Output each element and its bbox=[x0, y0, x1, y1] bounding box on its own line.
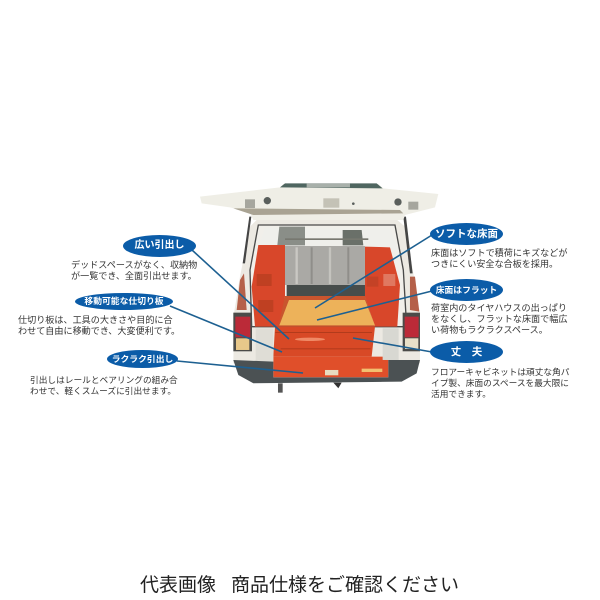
text: wide drawer: デッドスペースがなく、収納物 bbox=[71, 260, 197, 270]
text: flat floor: い荷物もラクラクスペース。 bbox=[431, 325, 548, 335]
label: wide drawer bbox=[123, 235, 196, 257]
text: soft floor: つきにくい安全な合板を採用。 bbox=[431, 259, 558, 269]
label: flat floor: 床面はフラット bbox=[436, 285, 497, 295]
label: sturdy: 丈 夫 bbox=[451, 346, 482, 358]
label: flat floor bbox=[430, 279, 503, 301]
label: soft floor bbox=[430, 223, 503, 245]
label: sturdy bbox=[430, 341, 503, 363]
label: easy drawer: ラクラク引出し bbox=[112, 354, 173, 364]
text: soft floor: 床面はソフトで積荷にキズなどが bbox=[431, 248, 567, 258]
text: wide drawer bbox=[71, 260, 197, 281]
text: movable partition: 仕切り板は、工具の大きさや目的に合 bbox=[18, 315, 173, 325]
label: easy drawer bbox=[107, 350, 178, 368]
text: easy drawer: わせで、軽くスムーズに引出せます。 bbox=[30, 386, 176, 396]
caption: 代表画像 商品仕様をご確認ください bbox=[140, 575, 459, 596]
text: sturdy bbox=[431, 367, 570, 399]
text: sturdy: フロアーキャビネットは頑丈な角パ bbox=[431, 367, 569, 377]
text: flat floor: 荷室内のタイヤハウスの出っぱり bbox=[431, 303, 567, 313]
leader line: soft floor bbox=[315, 235, 432, 308]
leader line: wide drawer bbox=[192, 250, 289, 339]
text: sturdy: イプ製、床面のスペースを最大限に bbox=[431, 378, 569, 388]
label: soft floor: ソフトな床面 bbox=[435, 228, 498, 240]
leader line: flat floor bbox=[317, 291, 432, 320]
leader line: easy drawer bbox=[177, 361, 303, 373]
text: movable partition bbox=[18, 315, 180, 336]
label: wide drawer: 広い引出し bbox=[134, 240, 184, 251]
text: flat floor: をなくし、フラットな床面で幅広 bbox=[431, 314, 567, 324]
label: movable partition bbox=[75, 293, 173, 310]
text: sturdy: 活用できます。 bbox=[431, 389, 491, 399]
text: flat floor bbox=[431, 303, 568, 335]
text: easy drawer: 引出しはレールとベアリングの組み合 bbox=[30, 375, 178, 385]
text: easy drawer bbox=[30, 375, 178, 396]
leader line: movable partition bbox=[170, 306, 282, 352]
text: soft floor bbox=[431, 248, 568, 269]
text: movable partition: わせて自由に移動でき、大変便利です。 bbox=[18, 326, 180, 336]
label: movable partition: 移動可能な仕切り板 bbox=[84, 296, 164, 306]
leader line: sturdy bbox=[353, 338, 432, 352]
text: wide drawer: が一覧でき、全面引出せます。 bbox=[71, 271, 197, 281]
